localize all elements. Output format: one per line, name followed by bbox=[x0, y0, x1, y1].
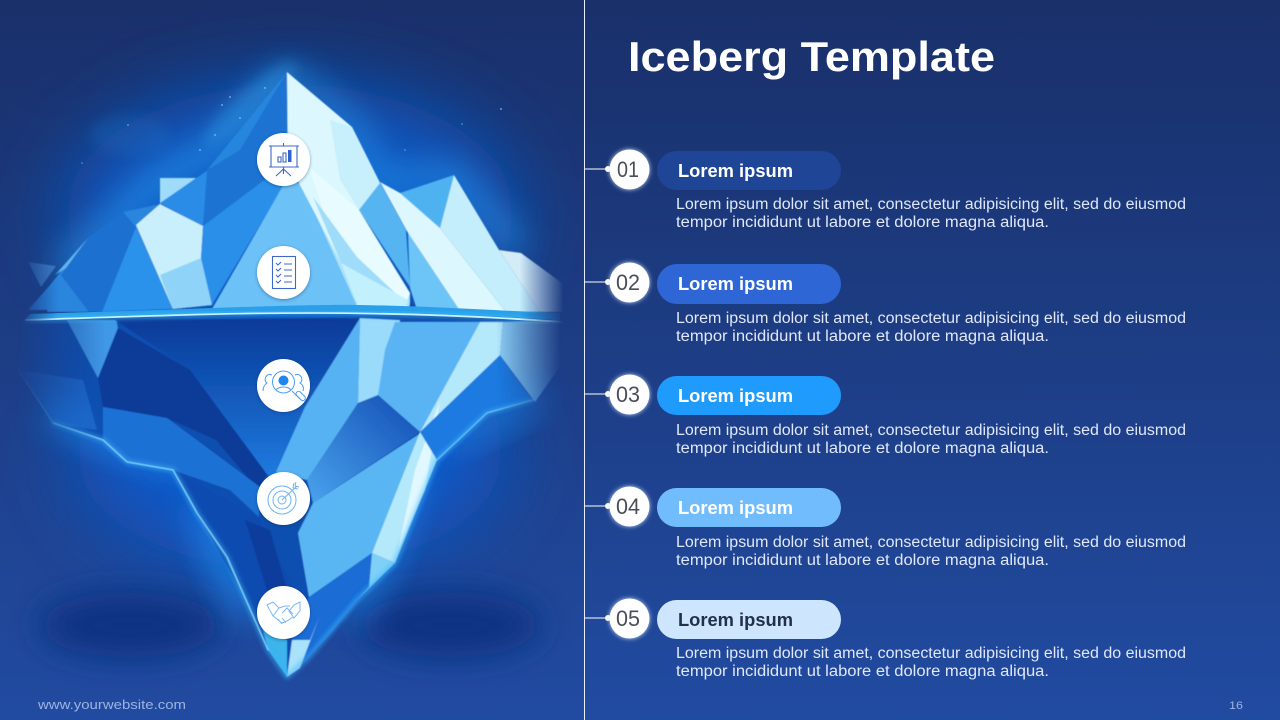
item 02: Lorem ipsum bbox=[678, 273, 793, 294]
item 05: 05 bbox=[616, 606, 640, 631]
item 03 bbox=[585, 374, 1186, 457]
page number: 16 bbox=[1229, 700, 1243, 712]
item 03: Lorem ipsum dolor sit amet, consectetur adipisicing elit, sed do eiusmod bbox=[676, 422, 1186, 439]
icon badge: handshake bbox=[257, 586, 310, 639]
item 02 bbox=[585, 262, 1186, 345]
item 04: Lorem ipsum dolor sit amet, consectetur adipisicing elit, sed do eiusmod bbox=[676, 534, 1186, 551]
item 02: Lorem ipsum dolor sit amet, consectetur adipisicing elit, sed do eiusmod bbox=[676, 310, 1186, 327]
icon badge: presentation chart bbox=[257, 133, 310, 186]
item 01: 01 bbox=[617, 157, 639, 182]
iceberg above water bbox=[28, 72, 565, 314]
icon badge: checklist bbox=[257, 246, 310, 299]
item 04 bbox=[585, 486, 1186, 569]
item 01: Lorem ipsum bbox=[678, 160, 793, 181]
item 05 bbox=[585, 598, 1186, 680]
item 04: 04 bbox=[616, 494, 640, 519]
iceberg illustration bbox=[17, 72, 570, 677]
item 04: tempor incididunt ut labore et dolore magna aliqua. bbox=[676, 552, 1049, 569]
title: Iceberg Template bbox=[628, 33, 995, 80]
item 01: Lorem ipsum dolor sit amet, consectetur adipisicing elit, sed do eiusmod bbox=[676, 196, 1186, 213]
vertical divider bbox=[584, 0, 585, 720]
item 03: 03 bbox=[616, 382, 640, 407]
item 03: Lorem ipsum bbox=[678, 385, 793, 406]
item 05: Lorem ipsum dolor sit amet, consectetur adipisicing elit, sed do eiusmod bbox=[676, 645, 1186, 662]
icon badge: target bbox=[257, 472, 310, 525]
item 01 bbox=[585, 150, 1186, 231]
iceberg below water bbox=[17, 318, 570, 677]
item 05: Lorem ipsum bbox=[678, 609, 793, 630]
website footer: www.yourwebsite.com bbox=[37, 697, 186, 712]
item 05: tempor incididunt ut labore et dolore magna aliqua. bbox=[676, 663, 1049, 680]
item 02: 02 bbox=[616, 270, 640, 295]
item 03: tempor incididunt ut labore et dolore magna aliqua. bbox=[676, 440, 1049, 457]
glowing outline bbox=[20, 373, 533, 677]
background glow and night sky bbox=[39, 54, 550, 657]
icon badge: people search bbox=[257, 359, 310, 412]
item 02: tempor incididunt ut labore et dolore magna aliqua. bbox=[676, 328, 1049, 345]
item 01: tempor incididunt ut labore et dolore magna aliqua. bbox=[676, 214, 1049, 231]
waterline bbox=[25, 305, 565, 322]
item 04: Lorem ipsum bbox=[678, 497, 793, 518]
